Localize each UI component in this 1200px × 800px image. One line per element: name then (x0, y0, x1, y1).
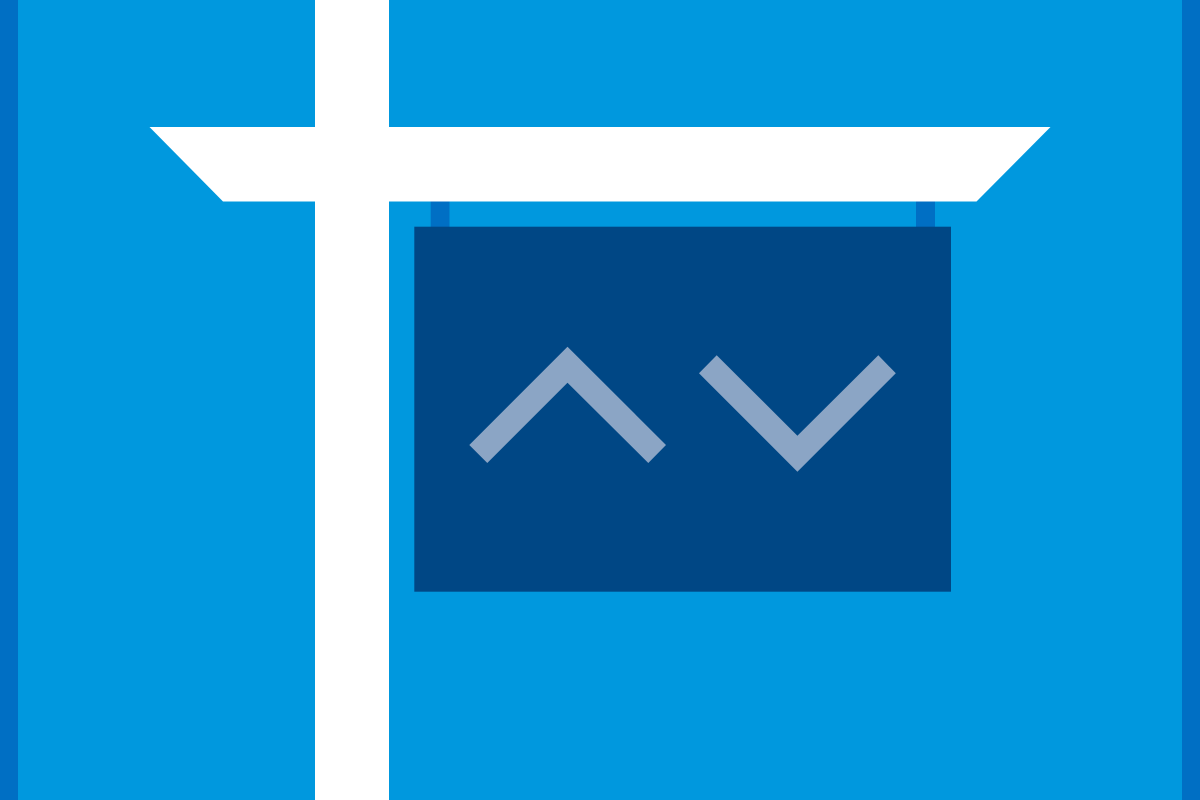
sign post (150, 0, 1050, 800)
hanging sign (414, 227, 951, 592)
icon: down chevron (699, 355, 896, 472)
sign board (414, 227, 951, 592)
vertical post (315, 0, 389, 800)
left edge band (0, 0, 18, 800)
left sign hanger (431, 200, 450, 228)
icon: up chevron (469, 347, 666, 463)
horizontal crossbar (150, 127, 1050, 202)
right edge band (1182, 0, 1200, 800)
right sign hanger (916, 200, 935, 228)
